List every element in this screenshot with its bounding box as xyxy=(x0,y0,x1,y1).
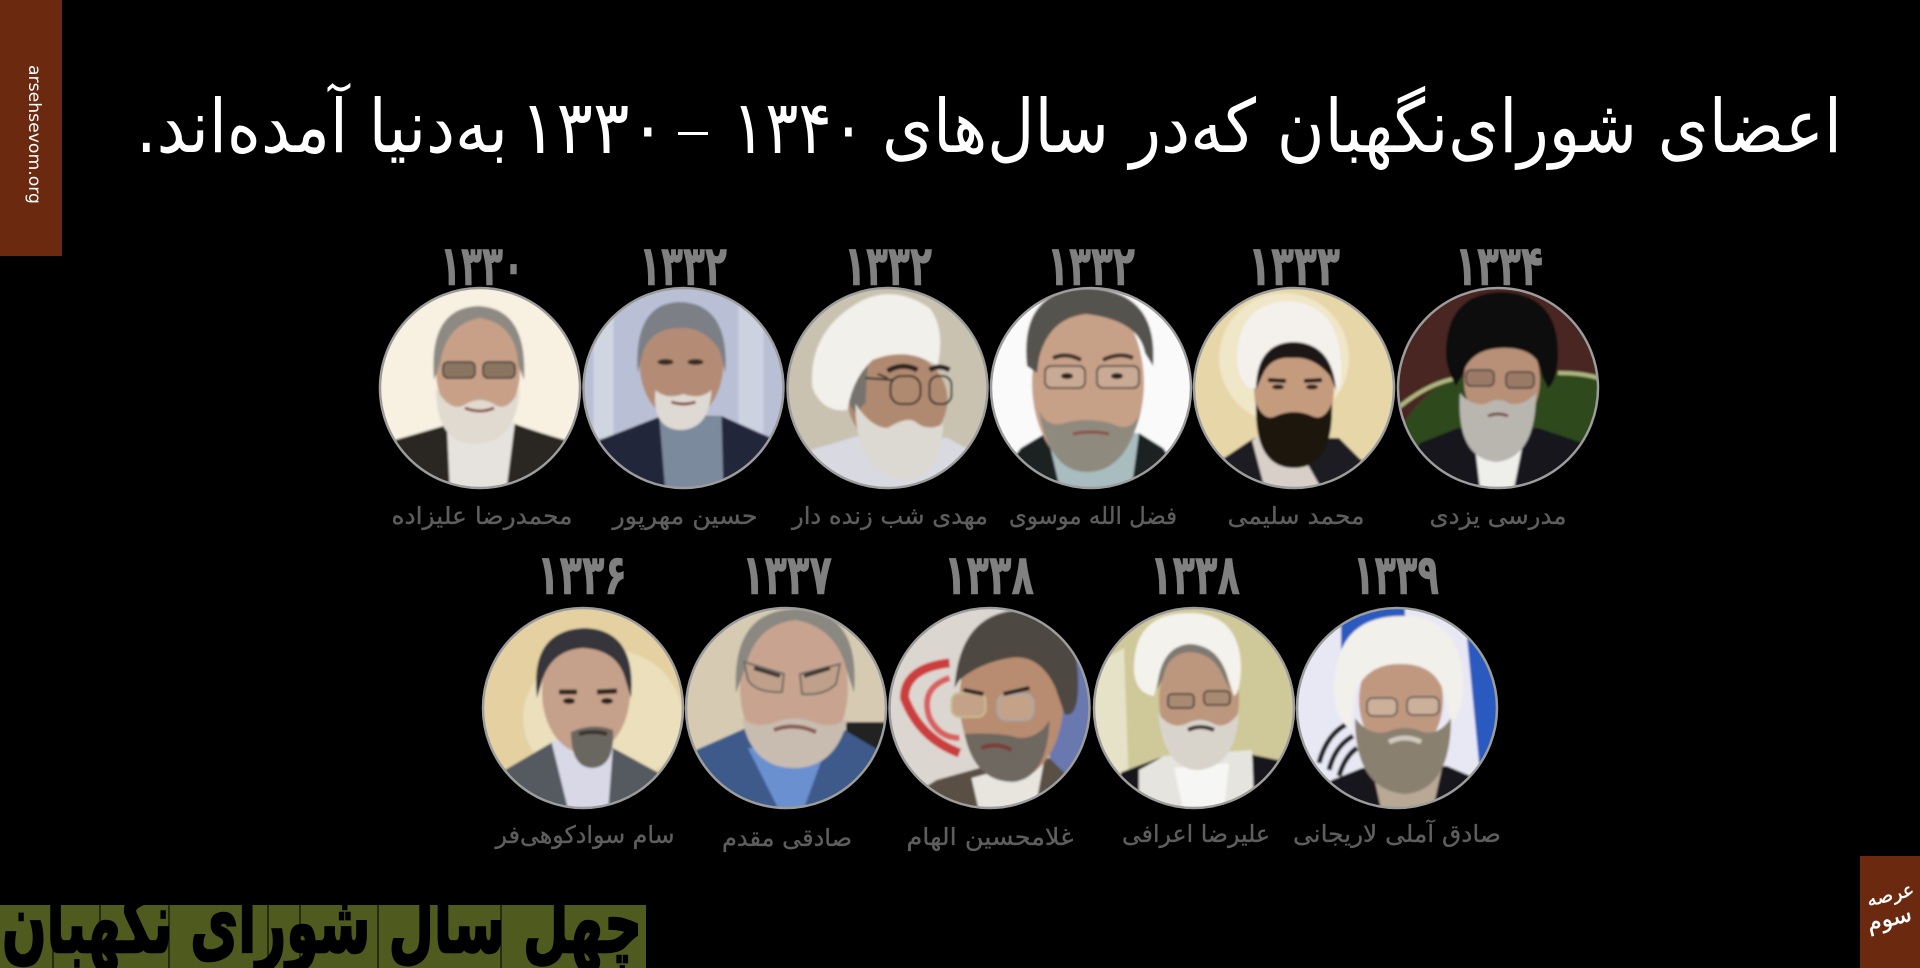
corner logo tab xyxy=(1859,856,1920,968)
portrait: Sadegh Amoli Larijani xyxy=(1292,603,1502,813)
name: غلامحسین الهام xyxy=(906,823,1074,851)
year 1330: ۱۳۳۰ xyxy=(440,234,524,299)
title: ۱۳۳۰ xyxy=(520,85,666,171)
portrait: Alireza Arafi xyxy=(1089,603,1299,813)
member: Shab-zendedar xyxy=(782,234,992,530)
name: حسین مهرپور xyxy=(611,502,758,530)
title xyxy=(136,82,1842,171)
portrait: Gholamhossein Elham xyxy=(884,603,1094,813)
name: مدرسی یزدی xyxy=(1430,502,1566,530)
member: Arafi xyxy=(1089,543,1299,848)
side tab: website xyxy=(0,0,62,256)
member: Elham xyxy=(884,543,1094,851)
portrait: Sadeghi Moghaddam xyxy=(681,603,891,813)
name: محمد سلیمی xyxy=(1228,502,1364,530)
member: Mousavi xyxy=(986,234,1196,530)
name: صادق آملی لاریجانی xyxy=(1293,819,1501,848)
year 1339: ۱۳۳۹ xyxy=(1353,543,1439,608)
name: محمدرضا علیزاده xyxy=(392,502,572,530)
name: فضل الله موسوی xyxy=(1009,502,1177,530)
portrait: Modarresi Yazdi xyxy=(1393,283,1603,493)
member: Alizadeh xyxy=(375,234,585,530)
corner logo tab: سوم xyxy=(1864,901,1914,937)
year 1334: ۱۳۳۴ xyxy=(1455,234,1543,299)
portrait: Mohammad Salimi xyxy=(1189,283,1399,493)
year 1338: ۱۳۳۸ xyxy=(1150,543,1240,608)
portrait: Fazlollah Mousavi xyxy=(986,283,1196,493)
portrait: Hossein Mehrpour xyxy=(578,283,788,493)
portrait: Mohammadreza Alizadeh xyxy=(375,283,585,493)
member: Modarresi Yazdi xyxy=(1393,234,1603,530)
member: Sadeghi Moghaddam xyxy=(681,543,891,852)
name: علیرضا اعرافی xyxy=(1122,820,1270,848)
member: Larijani xyxy=(1292,543,1502,848)
year 1332: ۱۳۳۲ xyxy=(844,234,932,299)
portrait: Sam Savadkouhi-far xyxy=(478,603,688,813)
year 1332: ۱۳۳۲ xyxy=(1047,234,1135,299)
title: به‌دنیا آمده‌اند. xyxy=(136,82,508,170)
side tab: website: arsehsevom.org xyxy=(24,65,44,204)
year 1337: ۱۳۳۷ xyxy=(742,543,832,608)
year 1338: ۱۳۳۸ xyxy=(944,543,1034,608)
year 1333: ۱۳۳۳ xyxy=(1248,234,1340,299)
title: ۱۳۴۰ xyxy=(732,85,865,171)
name: صادقی مقدم xyxy=(722,824,852,852)
corner logo tab: عرصه xyxy=(1864,878,1916,911)
name: مهدی شب زنده دار xyxy=(791,502,988,530)
bottom band: series title xyxy=(0,905,646,968)
year 1336: ۱۳۳۶ xyxy=(537,543,627,608)
member: Salimi xyxy=(1189,234,1399,530)
year 1332: ۱۳۳۲ xyxy=(639,234,727,299)
portrait: Mahdi Shab-zendedar xyxy=(782,283,992,493)
member: Savadkouhi-far xyxy=(478,543,688,849)
name: سام سوادکوهی‌فر xyxy=(495,821,674,849)
member: Mehrpour xyxy=(578,234,788,530)
